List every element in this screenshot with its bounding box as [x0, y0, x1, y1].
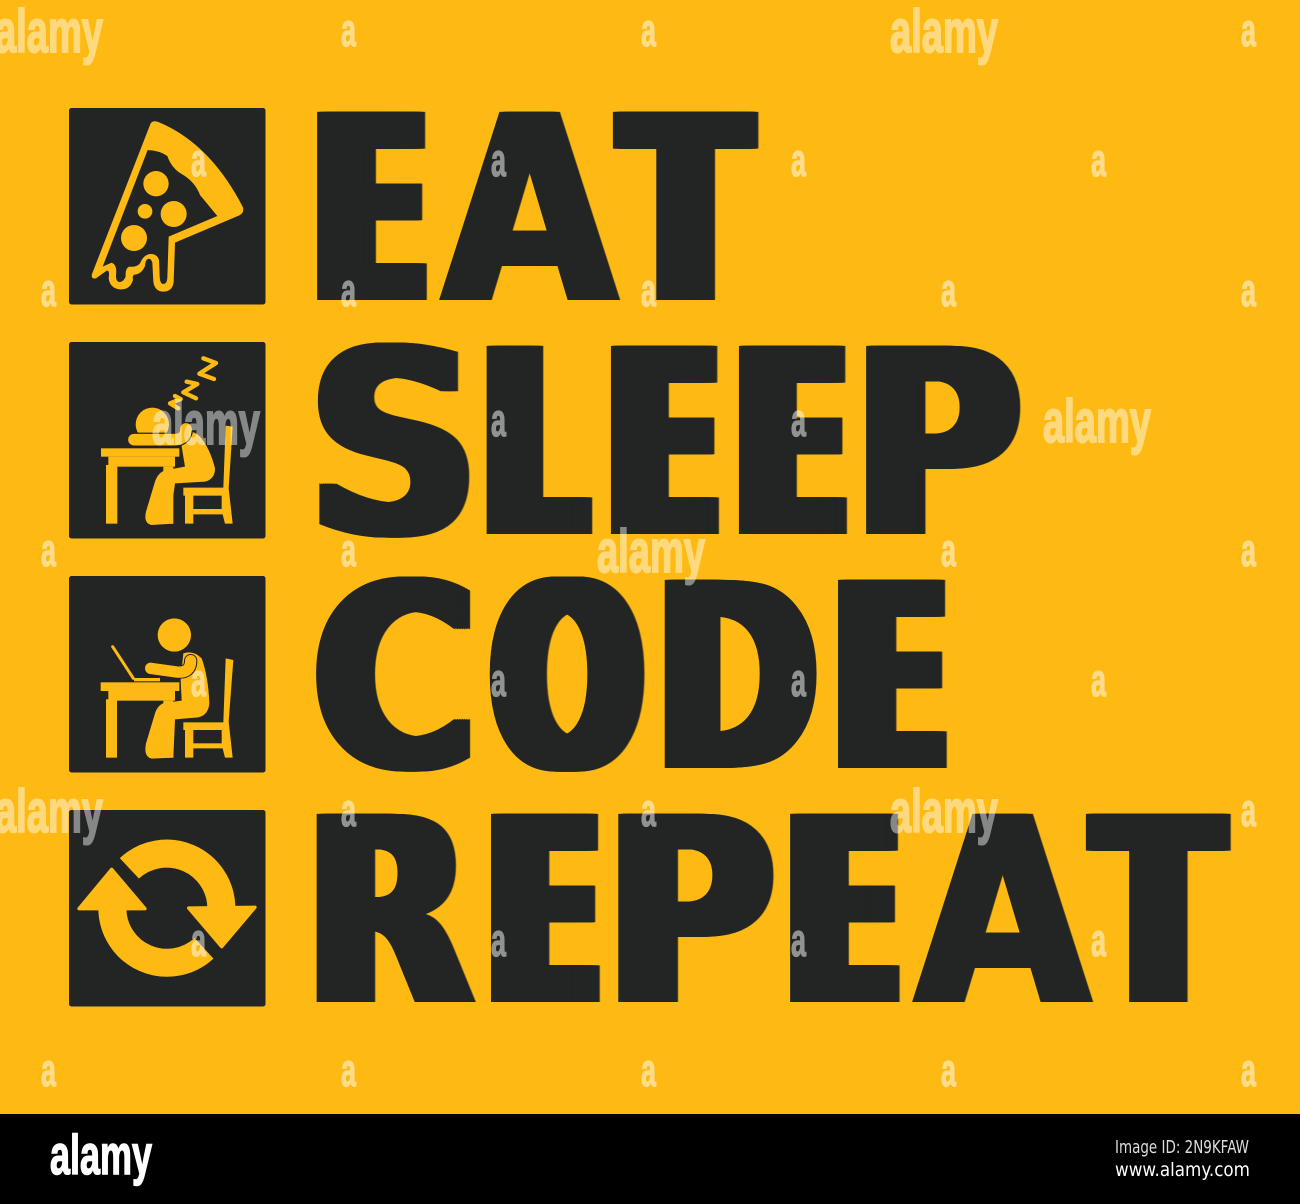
watermark: small a marks: a — [1241, 784, 1256, 836]
watermark: small a marks: a — [641, 1044, 656, 1096]
footer logo: alamy — [50, 1123, 152, 1186]
heading: SLEEP: S — [300, 295, 470, 595]
watermark: small a marks: a — [1091, 134, 1106, 186]
watermark: small a marks: a — [1241, 4, 1256, 56]
watermark: small a marks: a — [641, 784, 656, 836]
watermark: small a marks: a — [41, 524, 56, 576]
heading: REPEAT: A — [911, 763, 1084, 1063]
heading: CODE: C — [305, 529, 469, 829]
watermark: large alamy logos: alamy — [597, 518, 705, 585]
heading: EAT — [303, 61, 760, 361]
heading: REPEAT — [297, 763, 1232, 1063]
watermark: small a marks: a — [1241, 1044, 1256, 1096]
watermark: small a marks: a — [941, 264, 956, 316]
watermark: small a marks: a — [491, 654, 506, 706]
heading: SLEEP: E — [725, 295, 829, 595]
heading: CODE: E — [824, 529, 928, 829]
heading: REPEAT: E — [477, 763, 581, 1063]
watermark: large alamy logos: alamy — [0, 778, 103, 845]
watermark: small a marks: a — [191, 654, 206, 706]
icon: repeat arrows — [69, 810, 266, 1006]
heading: EAT: E — [303, 61, 408, 361]
watermark: small a marks: a — [341, 784, 356, 836]
watermark: small a marks: a — [791, 134, 806, 186]
heading: REPEAT: T — [1085, 763, 1207, 1063]
watermark: small a marks: a — [191, 134, 206, 186]
watermark: small a marks: a — [341, 1044, 356, 1096]
watermark: small a marks: a — [791, 654, 806, 706]
footer bar — [0, 1114, 1300, 1204]
watermark: small a marks: a — [41, 264, 56, 316]
heading: REPEAT: P — [597, 763, 766, 1063]
heading: CODE: D — [647, 529, 807, 829]
watermark: small a marks: a — [941, 524, 956, 576]
watermark: large alamy logos — [0, 0, 1151, 845]
watermark: small a marks: a — [491, 914, 506, 966]
heading: SLEEP — [300, 295, 1021, 595]
watermark: large alamy logos: alamy — [890, 778, 998, 845]
watermark: small a marks: a — [491, 134, 506, 186]
icon: person coding on laptop — [69, 576, 266, 772]
watermark: small a marks: a — [341, 4, 356, 56]
watermark: large alamy logos: alamy — [890, 0, 998, 65]
heading: SLEEP: E — [597, 295, 701, 595]
heading: CODE: O — [481, 529, 630, 829]
watermark: small a marks: a — [491, 394, 506, 446]
heading: SLEEP: P — [845, 295, 1013, 595]
footer website: www.alamy.com — [1115, 1159, 1250, 1181]
watermark: small a marks: a — [341, 264, 356, 316]
watermark: small a marks: a — [191, 914, 206, 966]
zzz — [170, 358, 216, 408]
watermark: small a marks: a — [641, 264, 656, 316]
icon: pizza slice — [69, 108, 266, 304]
watermark: small a marks: a — [941, 1044, 956, 1096]
heading: REPEAT: R — [297, 763, 462, 1063]
watermark: small a marks: a — [641, 4, 656, 56]
watermark: small a marks: a — [341, 524, 356, 576]
watermark: small a marks: a — [1091, 654, 1106, 706]
watermark: small a marks: a — [791, 394, 806, 446]
heading: EAT: A — [438, 61, 611, 361]
watermark: small a marks: a — [41, 1044, 56, 1096]
heading: REPEAT: E — [776, 763, 881, 1063]
icon: person asleep at desk — [69, 342, 266, 538]
heading: EAT: T — [612, 61, 734, 361]
watermark: large alamy logos: alamy — [152, 390, 260, 457]
heading: CODE — [305, 529, 948, 829]
watermark: small a marks: a — [1241, 524, 1256, 576]
watermark: large alamy logos: alamy — [1043, 388, 1151, 455]
heading: SLEEP: L — [473, 295, 568, 595]
footer image id: Image ID: 2N9KFAW — [1115, 1137, 1249, 1158]
watermark: small a marks: a — [791, 914, 806, 966]
watermark: small a marks: a — [1241, 264, 1256, 316]
watermark: small a marks: a — [1091, 914, 1106, 966]
